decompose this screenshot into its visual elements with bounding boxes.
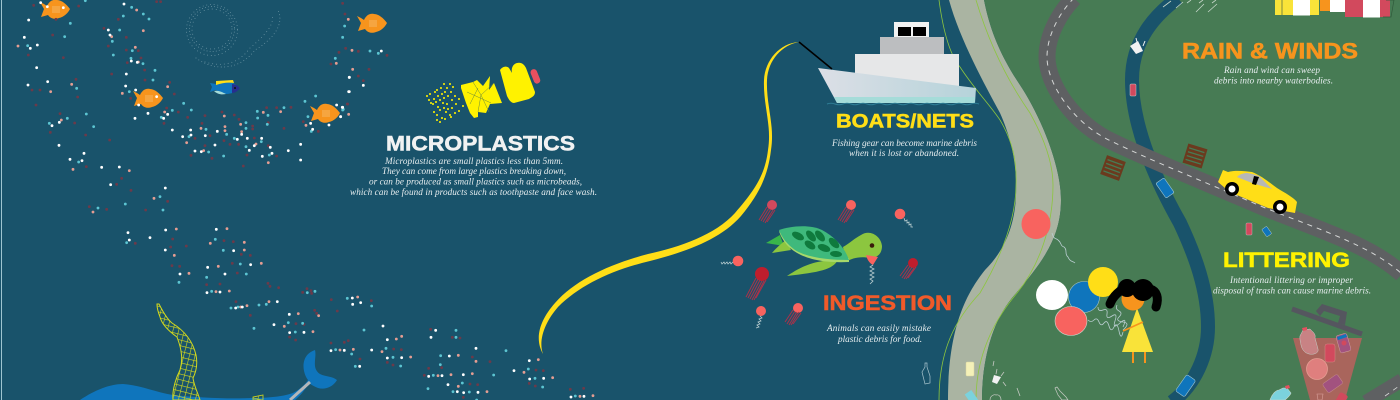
text: rain description: Rain and wind can sweep — [1223, 65, 1320, 75]
whale body — [80, 350, 337, 400]
fishing line from boat — [539, 42, 799, 354]
text: littering description: Intentional littering or improper — [1229, 275, 1353, 285]
icon: orange fish 4 — [357, 14, 387, 33]
whale with net — [80, 304, 337, 400]
text: microplastics description: which can be found in products such as toothpaste and face wash. — [350, 187, 597, 197]
text: boats description: Fishing gear can become marine debris — [831, 138, 977, 148]
green land — [982, 0, 1400, 400]
text: microplastics description — [350, 156, 597, 197]
icon: fishing boat — [799, 22, 979, 105]
particles — [427, 84, 463, 122]
plastic bottle beside trash can — [1270, 385, 1291, 400]
grey strap — [290, 382, 310, 400]
heading: microplastics: MICROPLASTICS — [386, 132, 575, 156]
road — [1047, 0, 1400, 400]
net scrap — [253, 395, 263, 400]
shards — [461, 76, 502, 118]
heading: rain and winds: RAIN & WINDS — [1182, 38, 1358, 64]
text: rain description — [1214, 65, 1333, 86]
balloons and girl — [1036, 267, 1157, 363]
heading: boats/nets: BOATS/NETS — [836, 110, 974, 132]
icon: orange fish 3 — [310, 104, 340, 123]
fishing net — [157, 304, 200, 400]
text: microplastics description: or can be produced as small plastics such as microbeads, — [369, 176, 582, 186]
text: microplastics description: Microplastics are small plastics less than 5mm. — [384, 156, 563, 166]
text: ingestion description: Animals can easily mistake — [826, 323, 931, 333]
text: ingestion description: plastic debris for food. — [837, 334, 922, 344]
heading: littering: LITTERING — [1223, 249, 1350, 272]
text: boats description: when it is lost or abandoned. — [849, 148, 959, 158]
icon: blue fish — [210, 80, 240, 94]
icon: orange fish 2 — [133, 89, 163, 108]
text: littering description: disposal of trash can cause marine debris. — [1213, 286, 1371, 296]
wooden pallets — [1100, 144, 1207, 181]
heading: ingestion: INGESTION — [823, 292, 952, 315]
text: microplastics description: They can come from large plastics breaking down, — [382, 166, 566, 176]
balloon on beach — [1022, 209, 1075, 263]
text: ingestion description — [826, 323, 931, 344]
litter on river and land — [922, 38, 1272, 400]
laundry on the line — [1275, 0, 1394, 18]
bottle — [500, 63, 535, 103]
text: boats description — [831, 138, 977, 158]
icon: trash can with litter — [1292, 304, 1362, 400]
icon: sea turtle — [766, 226, 882, 284]
icon: yellow car — [1218, 170, 1297, 214]
text: rain description: debris into nearby waterbodies. — [1214, 76, 1333, 86]
bottle cap — [530, 68, 541, 85]
microplastic particle swarm — [18, 1, 593, 400]
rain streaks — [1163, 0, 1217, 12]
river — [1132, 0, 1208, 400]
sand beach — [948, 0, 1061, 400]
jellyfish and plastic bags — [721, 200, 918, 328]
icon: orange fish 1 — [40, 0, 70, 19]
text: littering description — [1213, 275, 1371, 296]
icon: plastic breaking down into microplastics — [427, 63, 541, 122]
faint ring of tiny particles — [186, 4, 280, 67]
